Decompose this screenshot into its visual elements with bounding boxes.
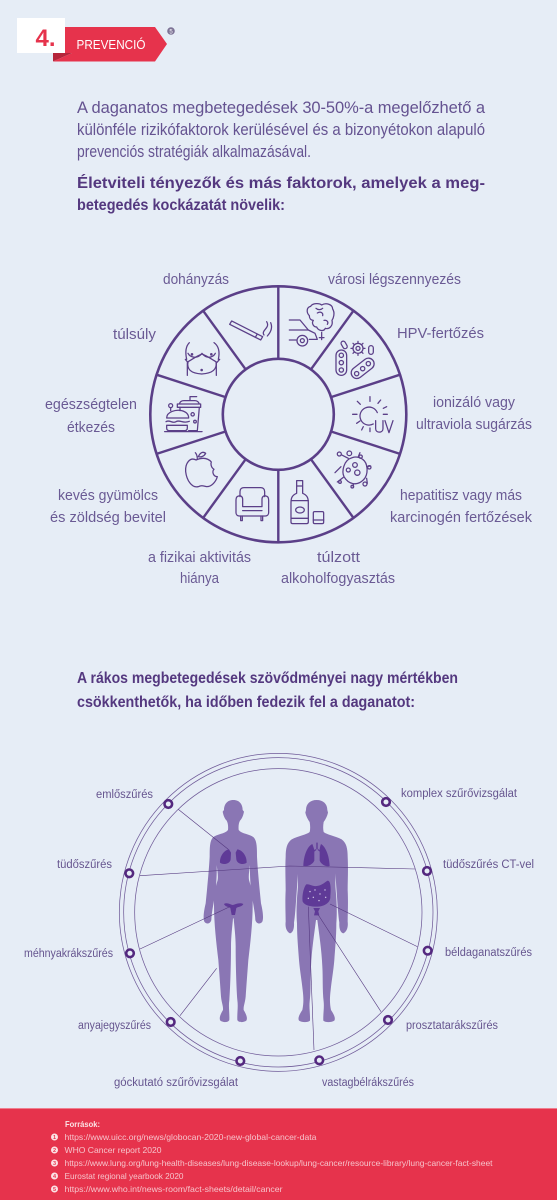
label: városi légszennyezés: városi légszennyezés — [328, 271, 461, 288]
label: egészségtelen étkezés: egészségtelen — [45, 396, 137, 413]
section header badge: PREVENCIÓ — [76, 37, 146, 52]
heading: risk factors: betegedés kockázatát növelik: — [77, 197, 285, 214]
label: hepatitisz vagy más karcinogén fertőzések: karcinogén fertőzések — [390, 509, 532, 526]
icon: overweight belly — [185, 343, 220, 375]
icon: burger and drink — [165, 397, 202, 432]
intro paragraph: A daganatos megbetegedések 30-50%-a megelőzhető a — [77, 99, 486, 117]
label: tüdőszűrés CT-vel: tüdőszűrés CT-vel — [443, 859, 534, 871]
sources footer: 5 — [53, 1187, 56, 1193]
label: a fizikai aktivitás hiánya: hiánya — [180, 570, 220, 587]
female lungs — [220, 849, 247, 864]
label: a fizikai aktivitás hiánya: a fizikai aktivitás — [148, 549, 251, 566]
icon: UV sun — [353, 397, 393, 433]
sources footer: WHO Cancer report 2020 — [64, 1145, 162, 1155]
label: egészségtelen étkezés: étkezés — [67, 419, 115, 436]
label: ionizáló vagy ultraviola sugárzás: ionizáló vagy — [433, 394, 515, 411]
label: kevés gyümölcs és zöldség bevitel: kevés gyümölcs — [58, 487, 158, 504]
intro paragraph: különféle rizikófaktorok kerülésével és a bizonyétokon alapuló — [77, 121, 485, 139]
label: hepatitisz vagy más karcinogén fertőzések — [390, 487, 532, 526]
label: túlzott alkoholfogyasztás: túlzott — [317, 549, 361, 566]
screening rings — [119, 753, 437, 1071]
icon: bitten apple — [186, 452, 217, 487]
label: ionizáló vagy ultraviola sugárzás: ultraviola sugárzás — [416, 416, 532, 433]
section header badge: 4. — [36, 25, 56, 52]
label: ionizáló vagy ultraviola sugárzás — [416, 394, 532, 433]
label: HPV-fertőzés: HPV-fertőzés — [397, 325, 484, 342]
label: méhnyakrákszűrés: méhnyakrákszűrés — [24, 948, 113, 960]
label: vastagbélrákszűrés: vastagbélrákszűrés — [322, 1077, 414, 1089]
risk factor wheel — [150, 286, 406, 542]
label: hepatitisz vagy más karcinogén fertőzések: hepatitisz vagy más — [400, 487, 522, 504]
heading: early detection — [77, 670, 458, 711]
heading: early detection: A rákos megbetegedések szövődményei nagy mértékben — [77, 670, 458, 687]
label: kevés gyümölcs és zöldség bevitel: és zöldség bevitel — [50, 509, 166, 526]
screening markers — [126, 798, 432, 1065]
intestine — [302, 881, 331, 907]
male lungs — [303, 843, 330, 866]
organs — [220, 843, 331, 915]
sources footer: https://www.lung.org/lung-health-diseases/lung-disease-lookup/lung-cancer/resource-library/lung-cancer-fact-sheet — [64, 1158, 493, 1168]
label: a fizikai aktivitás hiánya — [148, 549, 251, 587]
label: túlzott alkoholfogyasztás — [281, 549, 395, 587]
label: túlsúly: túlsúly — [113, 326, 156, 343]
label: túlzott alkoholfogyasztás: alkoholfogyasztás — [281, 570, 395, 587]
heading: risk factors: Életviteli tényezők és más faktorok, amelyek a meg- — [77, 175, 485, 192]
intro paragraph: prevenciós stratégiák alkalmazásával. — [77, 143, 311, 161]
label: prosztatarákszűrés: prosztatarákszűrés — [406, 1020, 498, 1032]
section header badge — [17, 18, 175, 62]
sources footer: 3 — [53, 1161, 56, 1167]
male silhouette — [285, 800, 348, 1022]
intro paragraph — [77, 99, 486, 161]
sources footer: 4 — [53, 1174, 57, 1180]
sources footer: Források: — [65, 1119, 100, 1129]
label: emlőszűrés: emlőszűrés — [96, 789, 153, 801]
sources footer — [0, 1108, 557, 1200]
intestine details — [308, 889, 326, 901]
uterus — [224, 903, 243, 915]
sources footer: 2 — [53, 1148, 56, 1154]
label: anyajegyszűrés: anyajegyszűrés — [78, 1020, 151, 1032]
heading: early detection: csökkenthetők, ha időben fedezik fel a daganatot: — [77, 694, 415, 711]
icon: bacteria — [336, 340, 376, 381]
label: komplex szűrővizsgálat: komplex szűrővizsgálat — [401, 788, 518, 800]
sources footer: 1 — [53, 1135, 56, 1141]
label: dohányzás: dohányzás — [163, 271, 229, 288]
label: góckutató szűrővizsgálat: góckutató szűrővizsgálat — [114, 1077, 239, 1089]
label: tüdőszűrés: tüdőszűrés — [57, 859, 112, 871]
sources footer: Eurostat regional yearbook 2020 — [64, 1171, 184, 1181]
icon: car with exhaust smog — [289, 304, 334, 346]
connector lines — [140, 809, 417, 1050]
heading: risk factors — [77, 175, 485, 214]
female silhouette — [204, 800, 263, 1022]
icon: bottle and glass — [291, 481, 324, 524]
sources footer: https://www.uicc.org/news/globocan-2020-new-global-cancer-data — [64, 1132, 317, 1142]
label: egészségtelen étkezés — [45, 396, 137, 436]
icon: cigarette — [230, 321, 272, 340]
sources footer: https://www.who.int/news-room/fact-sheets/detail/cancer — [64, 1184, 283, 1194]
icon: virus — [335, 451, 371, 488]
label: kevés gyümölcs és zöldség bevitel — [50, 487, 166, 526]
section header badge: 5 — [169, 30, 173, 36]
icon: armchair — [236, 488, 269, 521]
label: béldaganatszűrés: béldaganatszűrés — [445, 947, 532, 959]
